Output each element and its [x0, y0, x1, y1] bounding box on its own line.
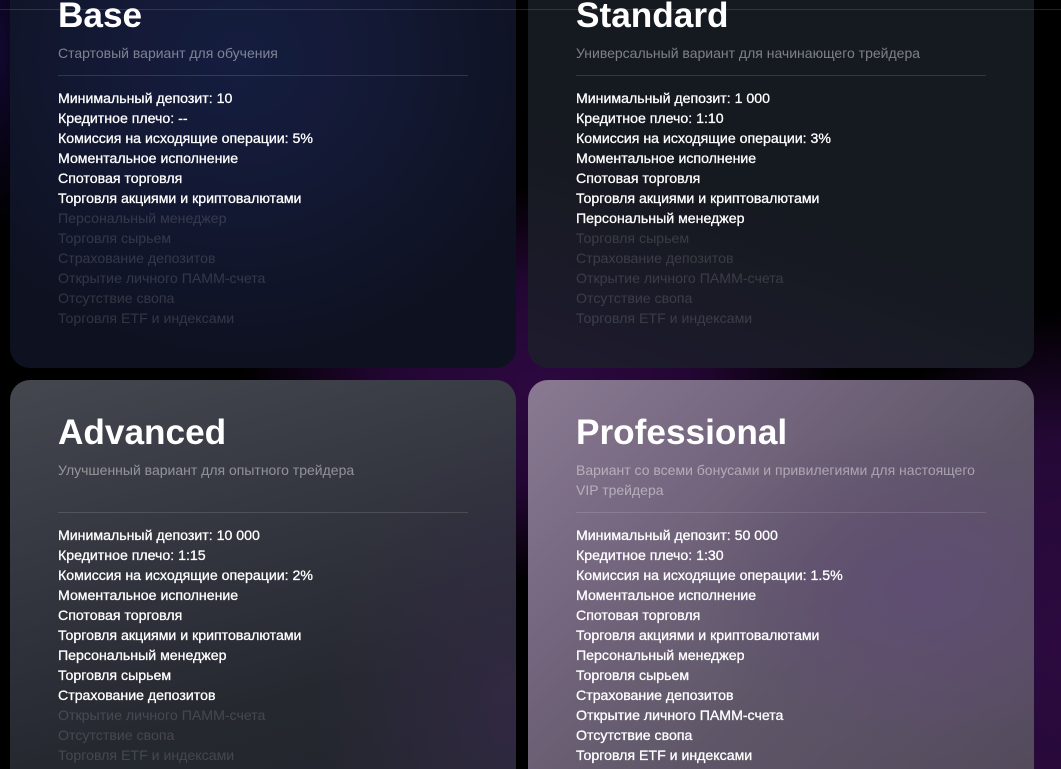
- feature list: Base: Торговля акциями и криптовалютами: [58, 190, 301, 206]
- feature list: Standard: Персональный менеджер: [576, 210, 744, 226]
- panel: Professional plan: [528, 380, 1034, 769]
- feature list: Professional: Кредитное плечо: 1:30: [576, 547, 724, 563]
- feature list: Base: Персональный менеджер: [58, 210, 226, 226]
- feature list: Base: Открытие личного ПАММ-счета: [58, 270, 265, 286]
- feature list: Base: Спотовая торговля: [58, 170, 182, 186]
- feature list: Professional: Комиссия на исходящие операции: 1.5%: [576, 567, 843, 583]
- feature list: Advanced: Торговля сырьем: [58, 667, 171, 683]
- feature list: Advanced: Страхование депозитов: [58, 687, 215, 703]
- feature list: Advanced: Торговля ETF и индексами: [58, 747, 234, 763]
- feature list: Base: Минимальный депозит: 10: [58, 90, 232, 106]
- feature list: Standard: Страхование депозитов: [576, 250, 733, 266]
- feature list: Standard: Открытие личного ПАММ-счета: [576, 270, 783, 286]
- feature list: Professional: Торговля акциями и криптовалютами: [576, 627, 819, 643]
- feature list: Advanced: Торговля акциями и криптовалютами: [58, 627, 301, 643]
- feature list: Standard: Торговля ETF и индексами: [576, 310, 752, 326]
- panel: Base plan: [10, 0, 516, 368]
- description: Professional: Вариант со всеми бонусами и привилегиями для настоящего VIP трейдера: [576, 462, 975, 498]
- feature list: Professional: Отсутствие свопа: [576, 727, 692, 743]
- feature list: Professional: Торговля ETF и индексами: [576, 747, 752, 763]
- feature list: Standard: [576, 90, 831, 326]
- feature list: Base: Торговля сырьем: [58, 230, 171, 246]
- description: Standard: Универсальный вариант для начинающего трейдера: [576, 45, 920, 61]
- feature list: Standard: Минимальный депозит: 1 000: [576, 90, 770, 106]
- feature list: Base: Торговля ETF и индексами: [58, 310, 234, 326]
- feature list: Professional: Торговля сырьем: [576, 667, 689, 683]
- heading: Professional: Professional: [576, 413, 787, 452]
- heading: Advanced: Advanced: [58, 413, 226, 452]
- feature list: Standard: Торговля акциями и криптовалютами: [576, 190, 819, 206]
- panel: Standard plan: [528, 0, 1034, 368]
- feature list: Advanced: Комиссия на исходящие операции: 2%: [58, 567, 313, 583]
- feature list: Advanced: Спотовая торговля: [58, 607, 182, 623]
- feature list: Advanced: Минимальный депозит: 10 000: [58, 527, 260, 543]
- feature list: Standard: Моментальное исполнение: [576, 150, 756, 166]
- feature list: Standard: Кредитное плечо: 1:10: [576, 110, 724, 126]
- feature list: Professional: Минимальный депозит: 50 000: [576, 527, 778, 543]
- feature list: Advanced: [58, 527, 313, 763]
- feature list: Base: Страхование депозитов: [58, 250, 215, 266]
- panel: Advanced plan: [10, 380, 516, 769]
- feature list: Professional: [576, 527, 843, 764]
- feature list: Base: Кредитное плечо: --: [58, 110, 188, 126]
- feature list: Advanced: Персональный менеджер: [58, 647, 226, 663]
- feature list: Professional: Персональный менеджер: [576, 647, 744, 663]
- description: Advanced: Улучшенный вариант для опытного трейдера: [58, 462, 354, 478]
- feature list: Advanced: Отсутствие свопа: [58, 727, 174, 743]
- feature list: Professional: Открытие личного ПАММ-счета: [576, 707, 783, 723]
- feature list: Standard: Торговля сырьем: [576, 230, 689, 246]
- feature list: Standard: Отсутствие свопа: [576, 290, 692, 306]
- feature list: Professional: Спотовая торговля: [576, 607, 700, 623]
- feature list: Base: Комиссия на исходящие операции: 5%: [58, 130, 313, 146]
- feature list: Advanced: Открытие личного ПАММ-счета: [58, 707, 265, 723]
- feature list: Base: [58, 90, 313, 326]
- feature list: Base: Отсутствие свопа: [58, 290, 174, 306]
- feature list: Advanced: Кредитное плечо: 1:15: [58, 547, 206, 563]
- feature list: Standard: Комиссия на исходящие операции: 3%: [576, 130, 831, 146]
- feature list: Advanced: Моментальное исполнение: [58, 587, 238, 603]
- description: Base: Стартовый вариант для обучения: [58, 45, 278, 61]
- feature list: Professional: Страхование депозитов: [576, 687, 733, 703]
- feature list: Standard: Спотовая торговля: [576, 170, 700, 186]
- feature list: Base: Моментальное исполнение: [58, 150, 238, 166]
- feature list: Professional: Моментальное исполнение: [576, 587, 756, 603]
